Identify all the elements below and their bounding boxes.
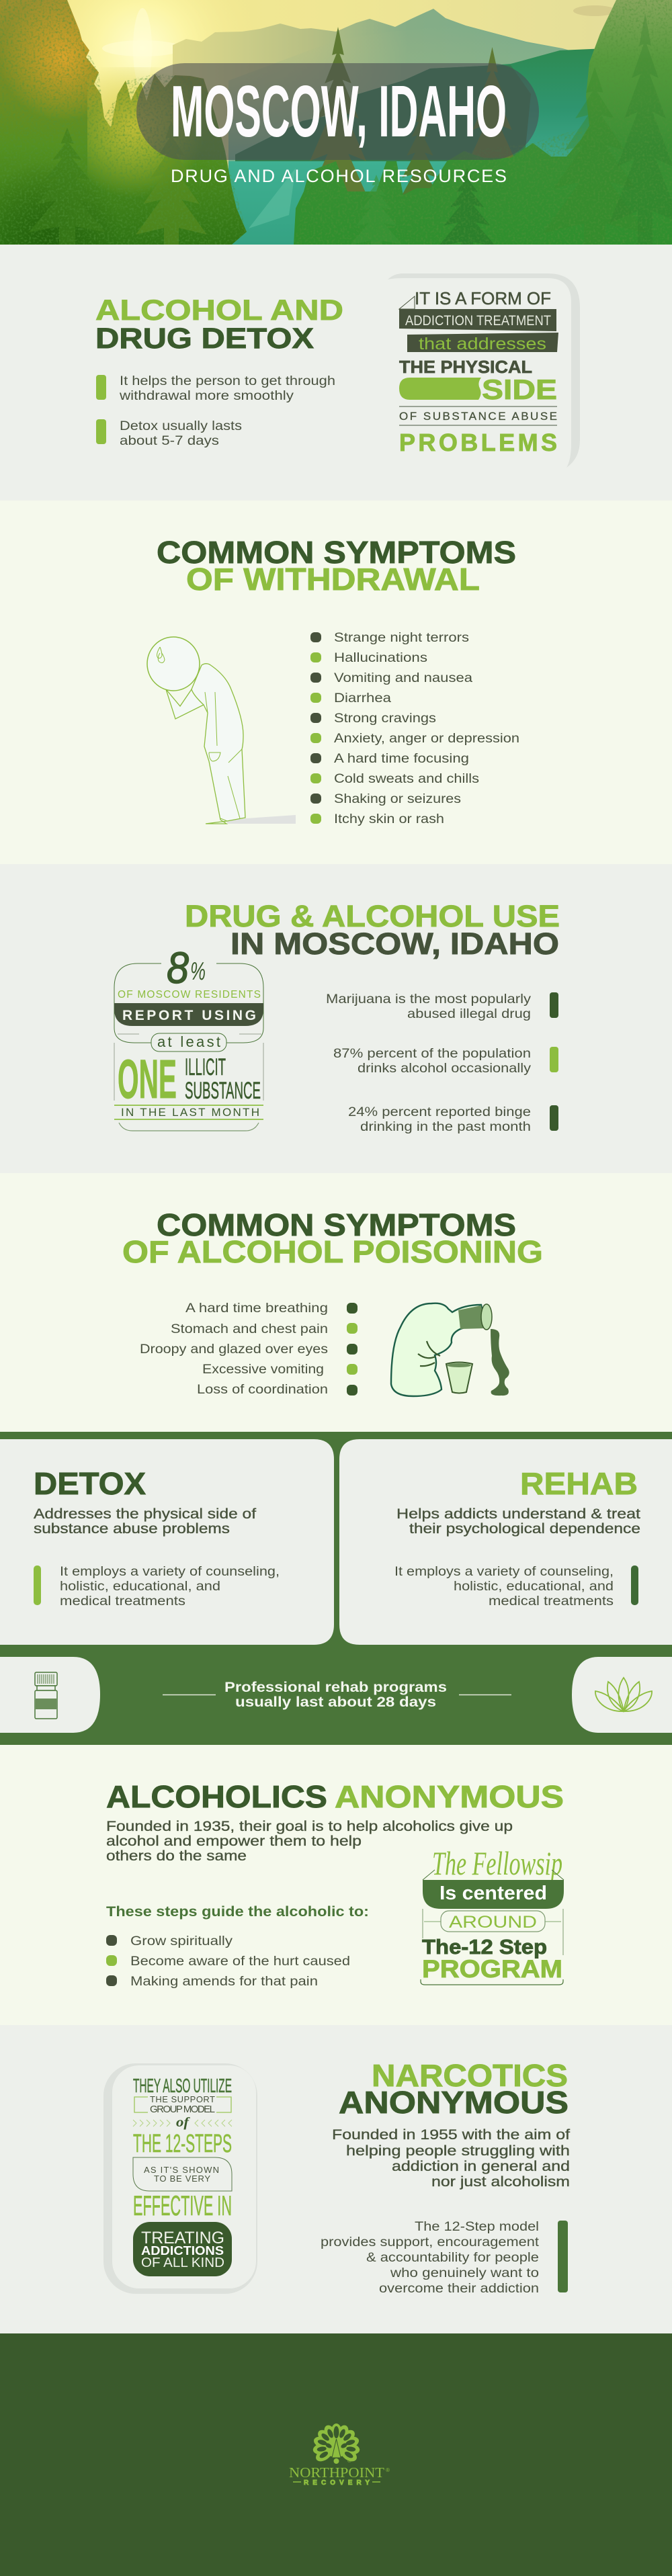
typographic card: 8 percent: % <box>190 957 206 986</box>
card: detox: medical treatments <box>60 1594 185 1608</box>
symptom list: Excessive vomiting <box>202 1363 324 1377</box>
panel: detox vs rehab band <box>0 1432 672 1745</box>
callout: rehab program length: Professional rehab programs <box>224 1680 447 1695</box>
symptom list: Strong cravings <box>334 712 436 726</box>
panel: alcohol and drug detox <box>0 245 672 501</box>
steps list: Become aware of the hurt caused <box>130 1955 350 1969</box>
steps list: Making amends for that pain <box>130 1975 318 1989</box>
logo: Northpoint Recovery: ® <box>347 2458 351 2464</box>
typographic card: twelve steps: THE SUPPORT <box>150 2094 215 2104</box>
typographic card: the fellowship: The Fellowsip <box>432 1844 562 1882</box>
typographic card: ADDICTION TREATMENT <box>405 313 551 329</box>
forest right and centre <box>310 27 366 191</box>
typographic card: IT IS A FORM OF <box>415 288 551 308</box>
typographic card: 8 percent <box>114 943 263 1131</box>
steps list: Grow spiritually <box>130 1934 233 1948</box>
symptom list: Cold sweats and chills <box>334 772 479 786</box>
symptom list: Droopy and glazed over eyes <box>140 1342 328 1357</box>
card: detox: DETOX <box>34 1466 146 1501</box>
detox facts: about 5-7 days <box>120 434 219 448</box>
heading: DRUG DETOX <box>95 323 314 355</box>
typographic card: 8 percent: OF MOSCOW RESIDENTS <box>118 989 261 1000</box>
card: rehab: holistic, educational, and <box>454 1580 614 1594</box>
typographic card: 8 percent: SUBSTANCE <box>185 1078 261 1104</box>
symptom list: Shaking or seizures <box>334 792 461 806</box>
heading: DRUG & ALCOHOL USE <box>185 899 560 933</box>
card: rehab: It employs a variety of counseling, <box>394 1565 614 1579</box>
typographic card: twelve steps: OF ALL KIND <box>141 2256 224 2270</box>
symptom list: Diarrhea <box>334 691 391 705</box>
typographic card <box>388 273 580 468</box>
heading: IN MOSCOW, IDAHO <box>230 927 559 961</box>
panel: alcoholics anonymous <box>0 1745 672 2025</box>
typographic card: twelve steps: EFFECTIVE IN <box>133 2190 232 2221</box>
typographic card: twelve steps: THE 12-STEPS <box>133 2130 232 2158</box>
heading: OF WITHDRAWAL <box>186 562 480 597</box>
logo: Northpoint Recovery: ® <box>386 2467 390 2473</box>
card: rehab: Helps addicts understand & treat <box>396 1506 640 1522</box>
description: Founded in 1955 with the aim of <box>332 2127 570 2143</box>
facts <box>326 992 558 1134</box>
facts: drinking in the past month <box>360 1120 531 1134</box>
heading: OF ALCOHOL POISONING <box>122 1234 543 1269</box>
card: detox: substance abuse problems <box>34 1521 230 1537</box>
title pill <box>136 63 539 160</box>
typographic card: twelve steps: AS IT'S SHOWN <box>144 2165 219 2175</box>
typographic card: the fellowship: The-12 Step <box>422 1935 547 1959</box>
card: rehab: medical treatments <box>489 1594 614 1608</box>
panel: drug and alcohol use in Moscow <box>0 864 672 1173</box>
description: nor just alcoholism <box>431 2174 570 2190</box>
12-step model note: The 12-Step model <box>415 2220 539 2234</box>
card: rehab: their psychological dependence <box>409 1521 640 1537</box>
description: others do the same <box>106 1848 247 1864</box>
forest left <box>0 0 247 245</box>
symptom list: Anxiety, anger or depression <box>334 732 519 746</box>
12-step model note: overcome their addiction <box>379 2282 539 2296</box>
typographic card: 8 percent: ILLICIT <box>185 1054 226 1080</box>
symptom list: Hallucinations <box>334 651 427 665</box>
symptom list: A hard time breathing <box>185 1301 328 1316</box>
facts: 24% percent reported binge <box>348 1105 531 1119</box>
card: rehab <box>339 1439 672 1645</box>
callout: rehab program length: usually last about 28 days <box>235 1694 436 1710</box>
typographic card: twelve steps: of <box>176 2115 191 2130</box>
12-step model note <box>321 2220 568 2296</box>
typographic card: the fellowship: Is centered <box>439 1883 547 1904</box>
description <box>106 1819 513 1864</box>
typographic card: twelve steps <box>103 2063 257 2294</box>
heading: NARCOTICS <box>372 2058 568 2093</box>
typographic card: PROBLEMS <box>399 429 557 456</box>
typographic card: THE PHYSICAL <box>399 357 532 377</box>
panel: common symptoms of alcohol poisoning <box>0 1173 672 1432</box>
panel: common symptoms of withdrawal <box>0 501 672 864</box>
description: alcohol and empower them to help <box>106 1834 362 1849</box>
heading <box>339 2058 569 2120</box>
detox facts: Detox usually lasts <box>120 419 242 433</box>
heading <box>122 1207 543 1269</box>
typographic card: twelve steps: ADDICTIONS <box>141 2244 224 2258</box>
heading: COMMON SYMPTOMS <box>157 1207 516 1242</box>
heading: ANONYMOUS <box>339 2085 569 2120</box>
typographic card: 8 percent: IN THE LAST MONTH <box>121 1106 259 1119</box>
facts: 87% percent of the population <box>333 1047 531 1061</box>
typographic card: the fellowship <box>421 1844 564 1985</box>
heading <box>157 535 516 597</box>
typographic card: 8 percent: ONE <box>118 1049 177 1110</box>
description: addiction in general and <box>392 2159 570 2174</box>
typographic card: OF SUBSTANCE ABUSE <box>399 410 557 423</box>
typographic card: twelve steps: THEY ALSO UTILIZE <box>133 2075 232 2097</box>
typographic card: 8 percent: at least <box>157 1033 220 1050</box>
logo: Northpoint Recovery: NORTHPOINT <box>289 2464 384 2481</box>
typographic card: 8 percent: REPORT USING <box>122 1008 256 1023</box>
heading: COMMON SYMPTOMS <box>157 535 516 570</box>
heading <box>95 294 343 355</box>
detox facts <box>96 374 335 448</box>
heading: ALCOHOLICS <box>106 1779 327 1814</box>
detox facts: withdrawal more smoothly <box>119 389 294 403</box>
symptom list <box>140 1301 358 1397</box>
panel: footer <box>0 2333 672 2576</box>
detox facts: It helps the person to get through <box>120 374 335 388</box>
panel: narcotics anonymous <box>0 2025 672 2333</box>
facts: Marijuana is the most popularly <box>326 992 532 1006</box>
symptom list: Stomach and chest pain <box>171 1322 328 1336</box>
hero banner <box>0 0 672 259</box>
callout: rehab program length <box>163 1680 511 1710</box>
logo: Northpoint Recovery: RECOVERY <box>304 2479 370 2487</box>
typographic card: SIDE <box>482 374 557 405</box>
symptom list <box>310 631 519 826</box>
hero banner: DRUG AND ALCOHOL RESOURCES <box>171 166 507 186</box>
typographic card: 8 percent: 8 <box>167 943 189 992</box>
description: Founded in 1935, their goal is to help alcoholics give up <box>106 1819 513 1834</box>
typographic card: the fellowship: AROUND <box>449 1913 537 1932</box>
typographic card: that addresses <box>419 335 546 353</box>
description: helping people struggling with <box>346 2143 570 2159</box>
typographic card: the fellowship: PROGRAM <box>422 1955 562 1983</box>
logo: Northpoint Recovery <box>289 2423 390 2487</box>
description <box>332 2127 570 2190</box>
card: detox: Addresses the physical side of <box>34 1506 256 1522</box>
heading <box>106 1779 564 1814</box>
typographic card: twelve steps: TO BE VERY <box>154 2174 210 2184</box>
card: rehab: REHAB <box>520 1466 638 1501</box>
heading: ALCOHOL AND <box>95 294 343 327</box>
symptom list: Strange night terrors <box>334 631 469 645</box>
card: detox: It employs a variety of counseling, <box>60 1565 280 1579</box>
icon: hunched over figure <box>147 637 296 824</box>
card: detox: holistic, educational, and <box>60 1580 220 1594</box>
heading <box>185 899 560 961</box>
icon: vomiting into glass <box>391 1303 509 1396</box>
facts: abused illegal drug <box>407 1007 531 1021</box>
heading: ANONYMOUS <box>335 1779 564 1814</box>
icon: pill bottle tab <box>0 1657 100 1733</box>
typographic card: twelve steps: GROUP MODEL <box>150 2104 215 2115</box>
12-step model note: & accountability for people <box>366 2251 539 2265</box>
symptom list: Loss of coordination <box>197 1383 328 1397</box>
symptom list: Itchy skin or rash <box>334 812 444 826</box>
icon: lotus tab <box>572 1657 672 1733</box>
12-step model note: provides support, encouragement <box>321 2235 540 2249</box>
card: detox <box>0 1439 334 1645</box>
facts: drinks alcohol occasionally <box>358 1062 532 1076</box>
symptom list: A hard time focusing <box>334 752 469 766</box>
symptom list: Vomiting and nausea <box>334 671 472 685</box>
typographic card: twelve steps: TREATING <box>141 2229 224 2247</box>
12-step model note: who genuinely want to <box>390 2266 539 2280</box>
steps list <box>106 1904 369 1989</box>
steps list: These steps guide the alcoholic to: <box>106 1904 369 1920</box>
